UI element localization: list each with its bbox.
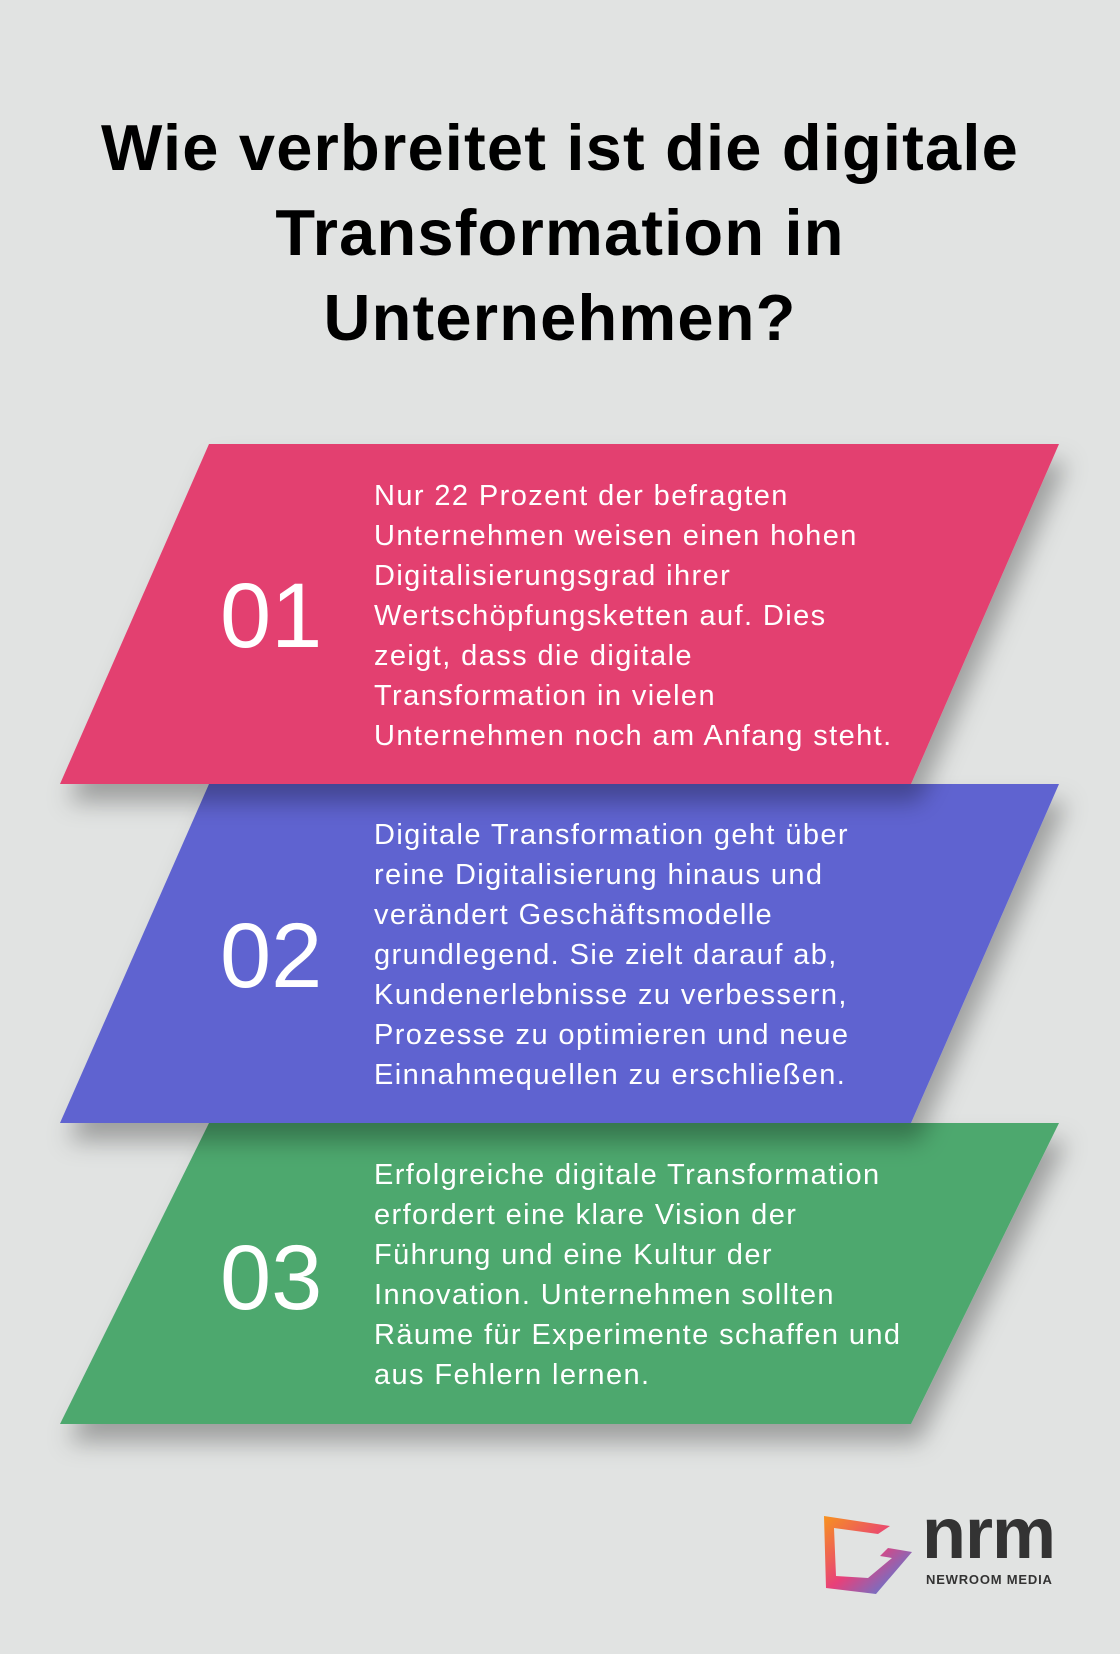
panel 2 text [374,819,849,1091]
panel 1 shape [60,444,1059,784]
panel 2 text: Einnahmequellen zu erschließen. [374,1059,846,1091]
panel 2 text: verändert Geschäftsmodelle [374,899,773,931]
panel 1 text: Transformation in vielen [374,680,716,712]
panel 2 text: Kundenerlebnisse zu verbessern, [374,979,848,1011]
icon: logo mark [824,1516,912,1594]
title: Wie verbreitet ist die digitale [101,111,1019,184]
panel 1 text [374,480,893,752]
panel 1 text: Wertschöpfungsketten auf. Dies [374,600,827,632]
panel 1 text: zeigt, dass die digitale [374,640,693,672]
panel 3 text [374,1159,901,1391]
title: Unternehmen? [323,281,797,354]
panel 3 text: erfordert eine klare Vision der [374,1199,797,1231]
panel 1 number: 01 [220,565,322,667]
panel 3 text: Führung und eine Kultur der [374,1239,773,1271]
panel 2 text: grundlegend. Sie zielt darauf ab, [374,939,838,971]
title: Transformation in [275,196,845,269]
panel 1 text: Digitalisierungsgrad ihrer [374,560,731,592]
panel 1 text: Unternehmen noch am Anfang steht. [374,720,893,752]
panel 3 number: 03 [220,1227,322,1329]
panel 3 text: aus Fehlern lernen. [374,1359,650,1391]
panel 3 text: Erfolgreiche digitale Transformation [374,1159,881,1191]
panel 1 text: Nur 22 Prozent der befragten [374,480,789,512]
panel 2 shape [60,784,1059,1123]
logo: NEWROOM MEDIA [926,1572,1053,1587]
panel 1 text: Unternehmen weisen einen hohen [374,520,858,552]
logo text: nrm [922,1494,1055,1574]
logo [824,1494,1055,1594]
panel 2 text: Prozesse zu optimieren und neue [374,1019,849,1051]
panel 2 number: 02 [220,905,322,1007]
panel 3 text: Räume für Experimente schaffen und [374,1319,901,1351]
panel 3 shape [60,1123,1059,1424]
panel 3 text: Innovation. Unternehmen sollten [374,1279,835,1311]
title [101,111,1019,354]
panel 2 text: Digitale Transformation geht über [374,819,849,851]
panel 2 text: reine Digitalisierung hinaus und [374,859,823,891]
